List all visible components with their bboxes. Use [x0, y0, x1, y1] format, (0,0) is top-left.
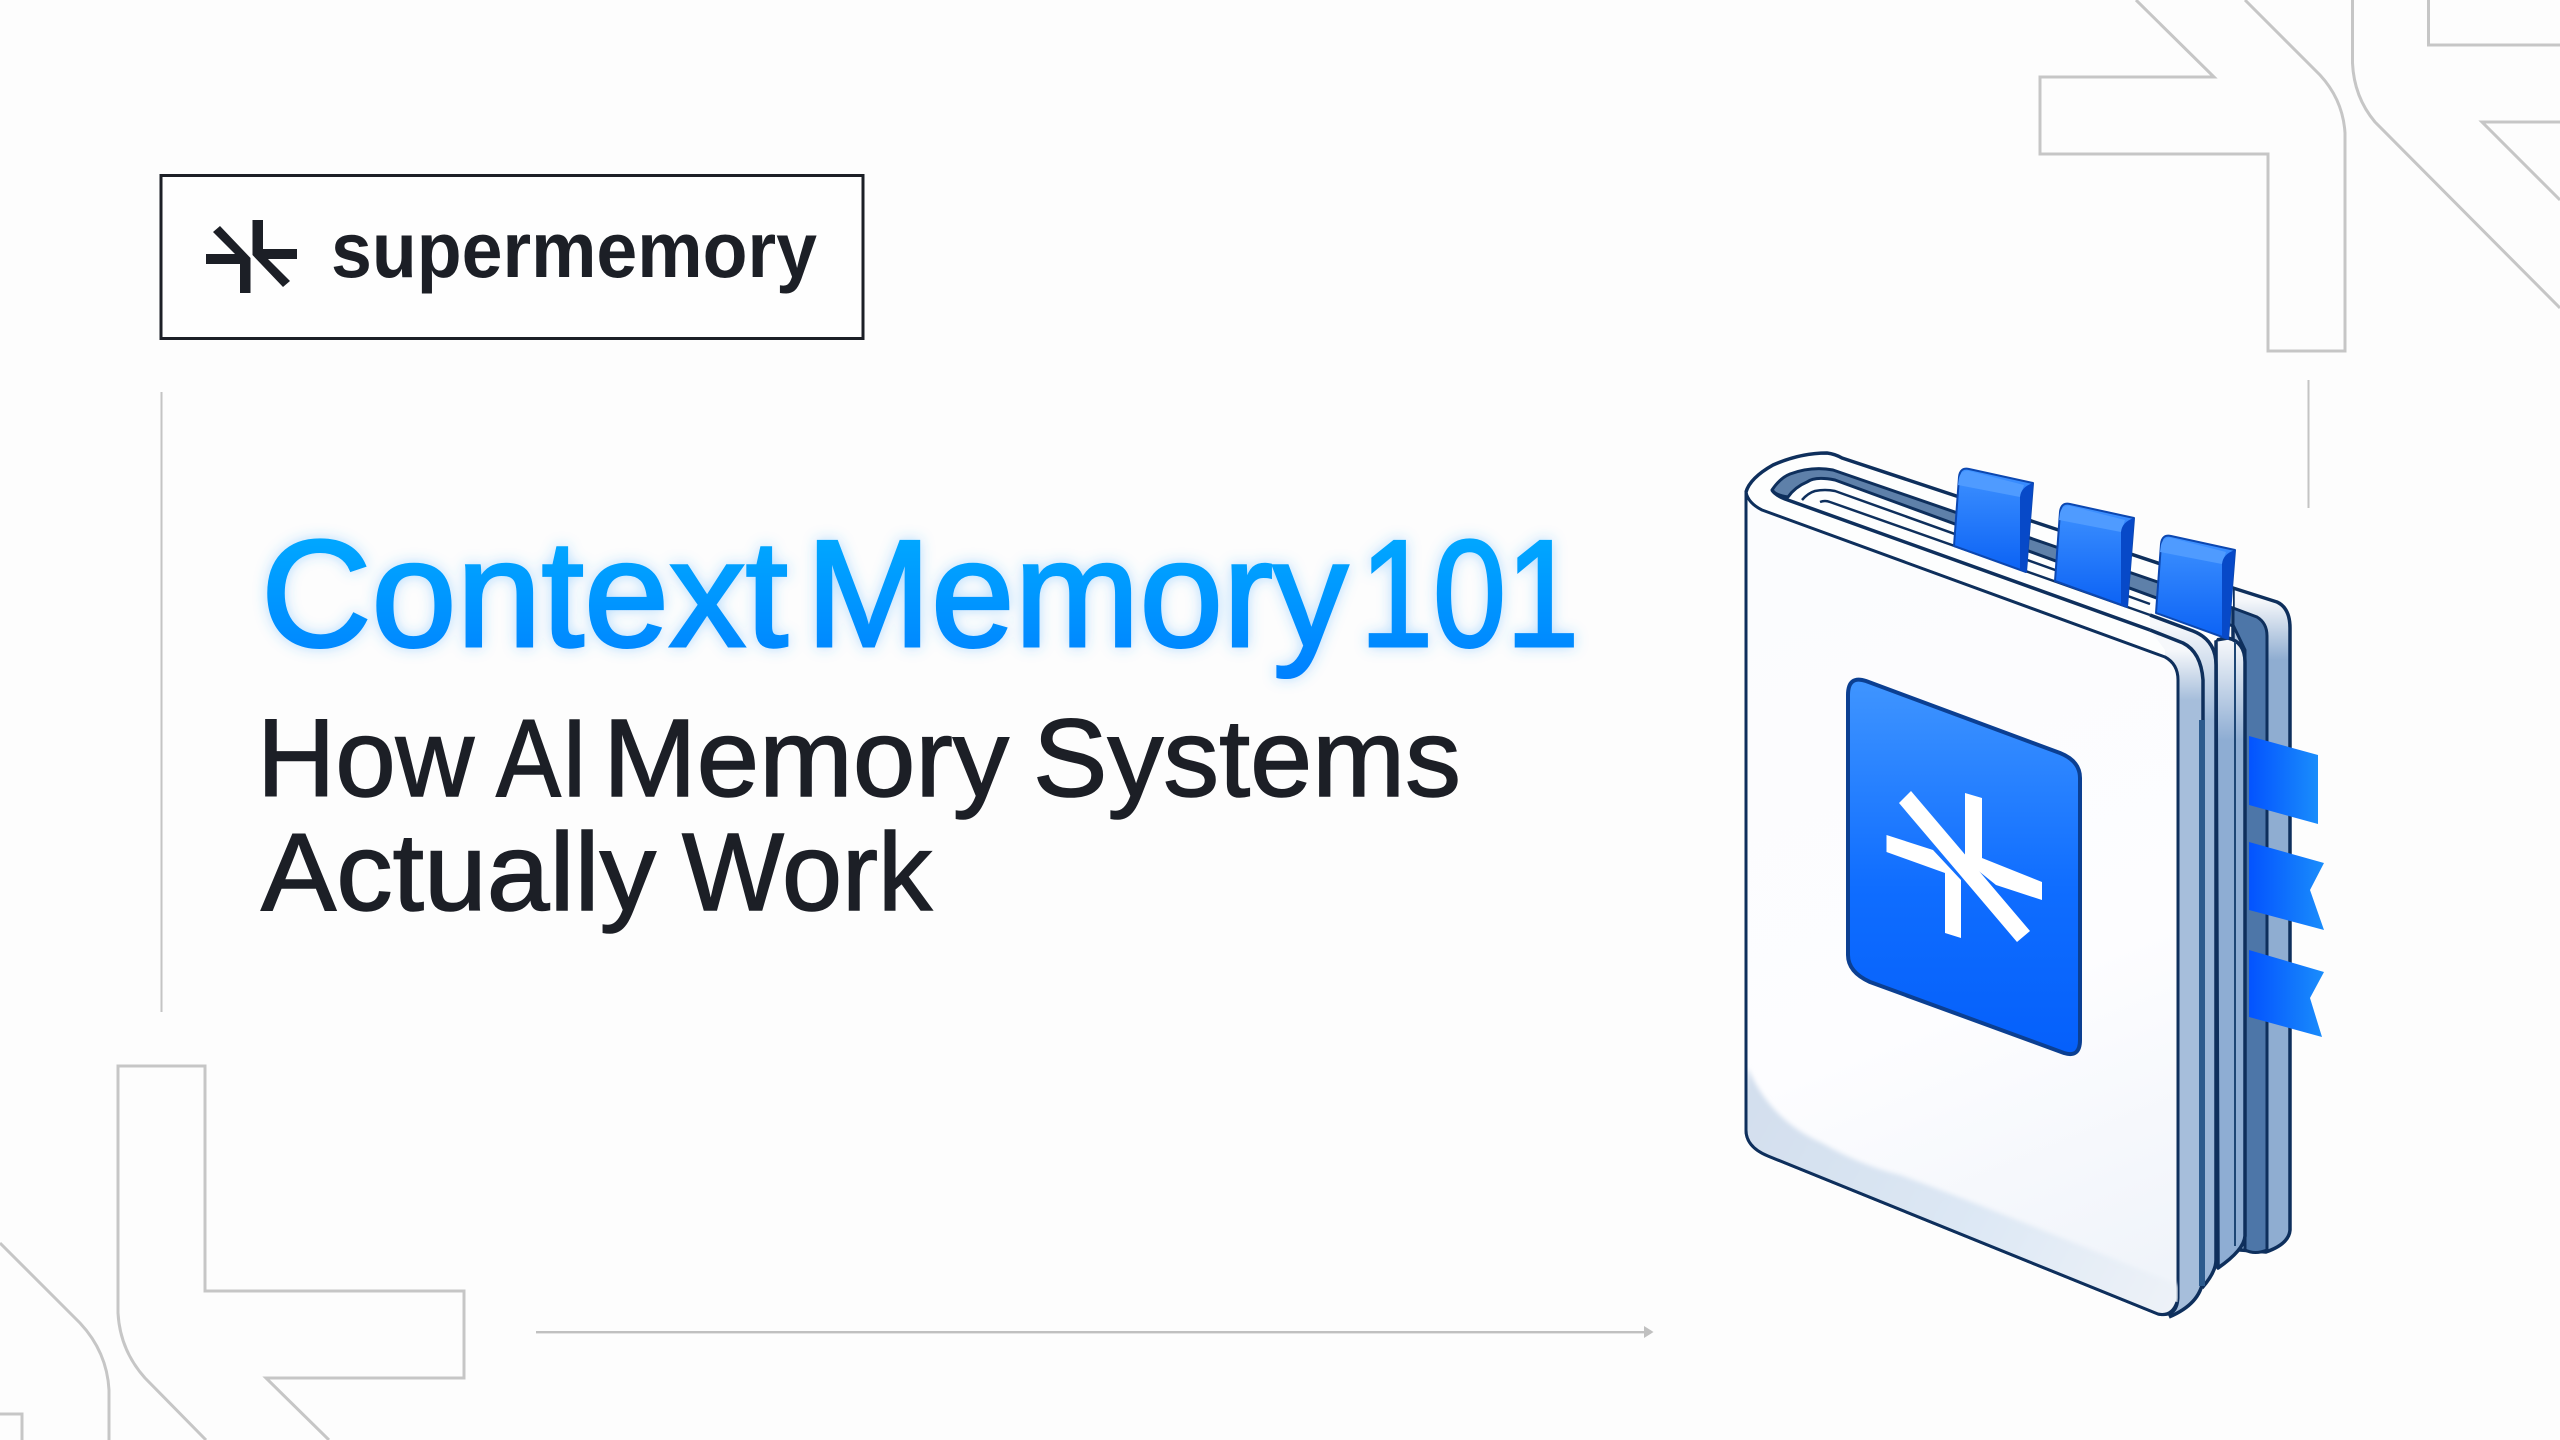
page block middle outline — [2150, 615, 2216, 1288]
dark page trough — [1772, 469, 2233, 626]
ribbon 2 — [2249, 842, 2324, 930]
top outline — [1746, 453, 2233, 588]
ribbon 1 — [2249, 736, 2318, 824]
back cover — [2233, 588, 2290, 1252]
page lines — [1746, 490, 2165, 657]
cover shading — [1740, 1068, 2178, 1325]
tab 3 — [2156, 536, 2235, 639]
cover edge outline — [2150, 630, 2203, 1317]
title: Memory — [806, 509, 1348, 679]
page block middle — [2150, 615, 2216, 1288]
top of book: white surface — [1746, 453, 2233, 657]
subtitle: Actually — [261, 811, 656, 934]
subtitle: Work — [682, 811, 933, 934]
cover edge — [2150, 630, 2203, 1317]
subtitle — [257, 697, 1461, 934]
decorative outline shapes: top right — [2040, 0, 2560, 351]
icon: white mark on panel — [1886, 791, 2042, 942]
left vertical rule — [160, 392, 162, 1012]
logo box — [161, 176, 863, 338]
subtitle: AI — [496, 697, 588, 820]
blue logo panel — [1848, 680, 2080, 1054]
arrow: horizontal pointer — [536, 1326, 1654, 1338]
title — [261, 509, 1579, 679]
wordmark: supermemory — [331, 205, 817, 294]
book illustration — [1740, 453, 2324, 1325]
tab 1 — [1954, 469, 2033, 572]
title: Context — [261, 509, 788, 679]
subtitle: Memory — [603, 697, 1009, 820]
decorative outline shapes: bottom left — [0, 1066, 464, 1440]
page block rear — [2216, 638, 2245, 1268]
top bookmark tabs — [1954, 469, 2235, 639]
side ribbons — [2249, 736, 2324, 1037]
ribbon 3 — [2249, 950, 2324, 1037]
inner dark board — [2233, 608, 2267, 1252]
tab 2 — [2055, 504, 2134, 607]
front cover — [1746, 492, 2178, 1315]
icon: supermemory mark — [206, 220, 297, 293]
title: 101 — [1360, 509, 1579, 679]
right vertical rule — [2308, 380, 2310, 508]
subtitle: How — [257, 697, 475, 820]
subtitle: Systems — [1033, 697, 1461, 820]
